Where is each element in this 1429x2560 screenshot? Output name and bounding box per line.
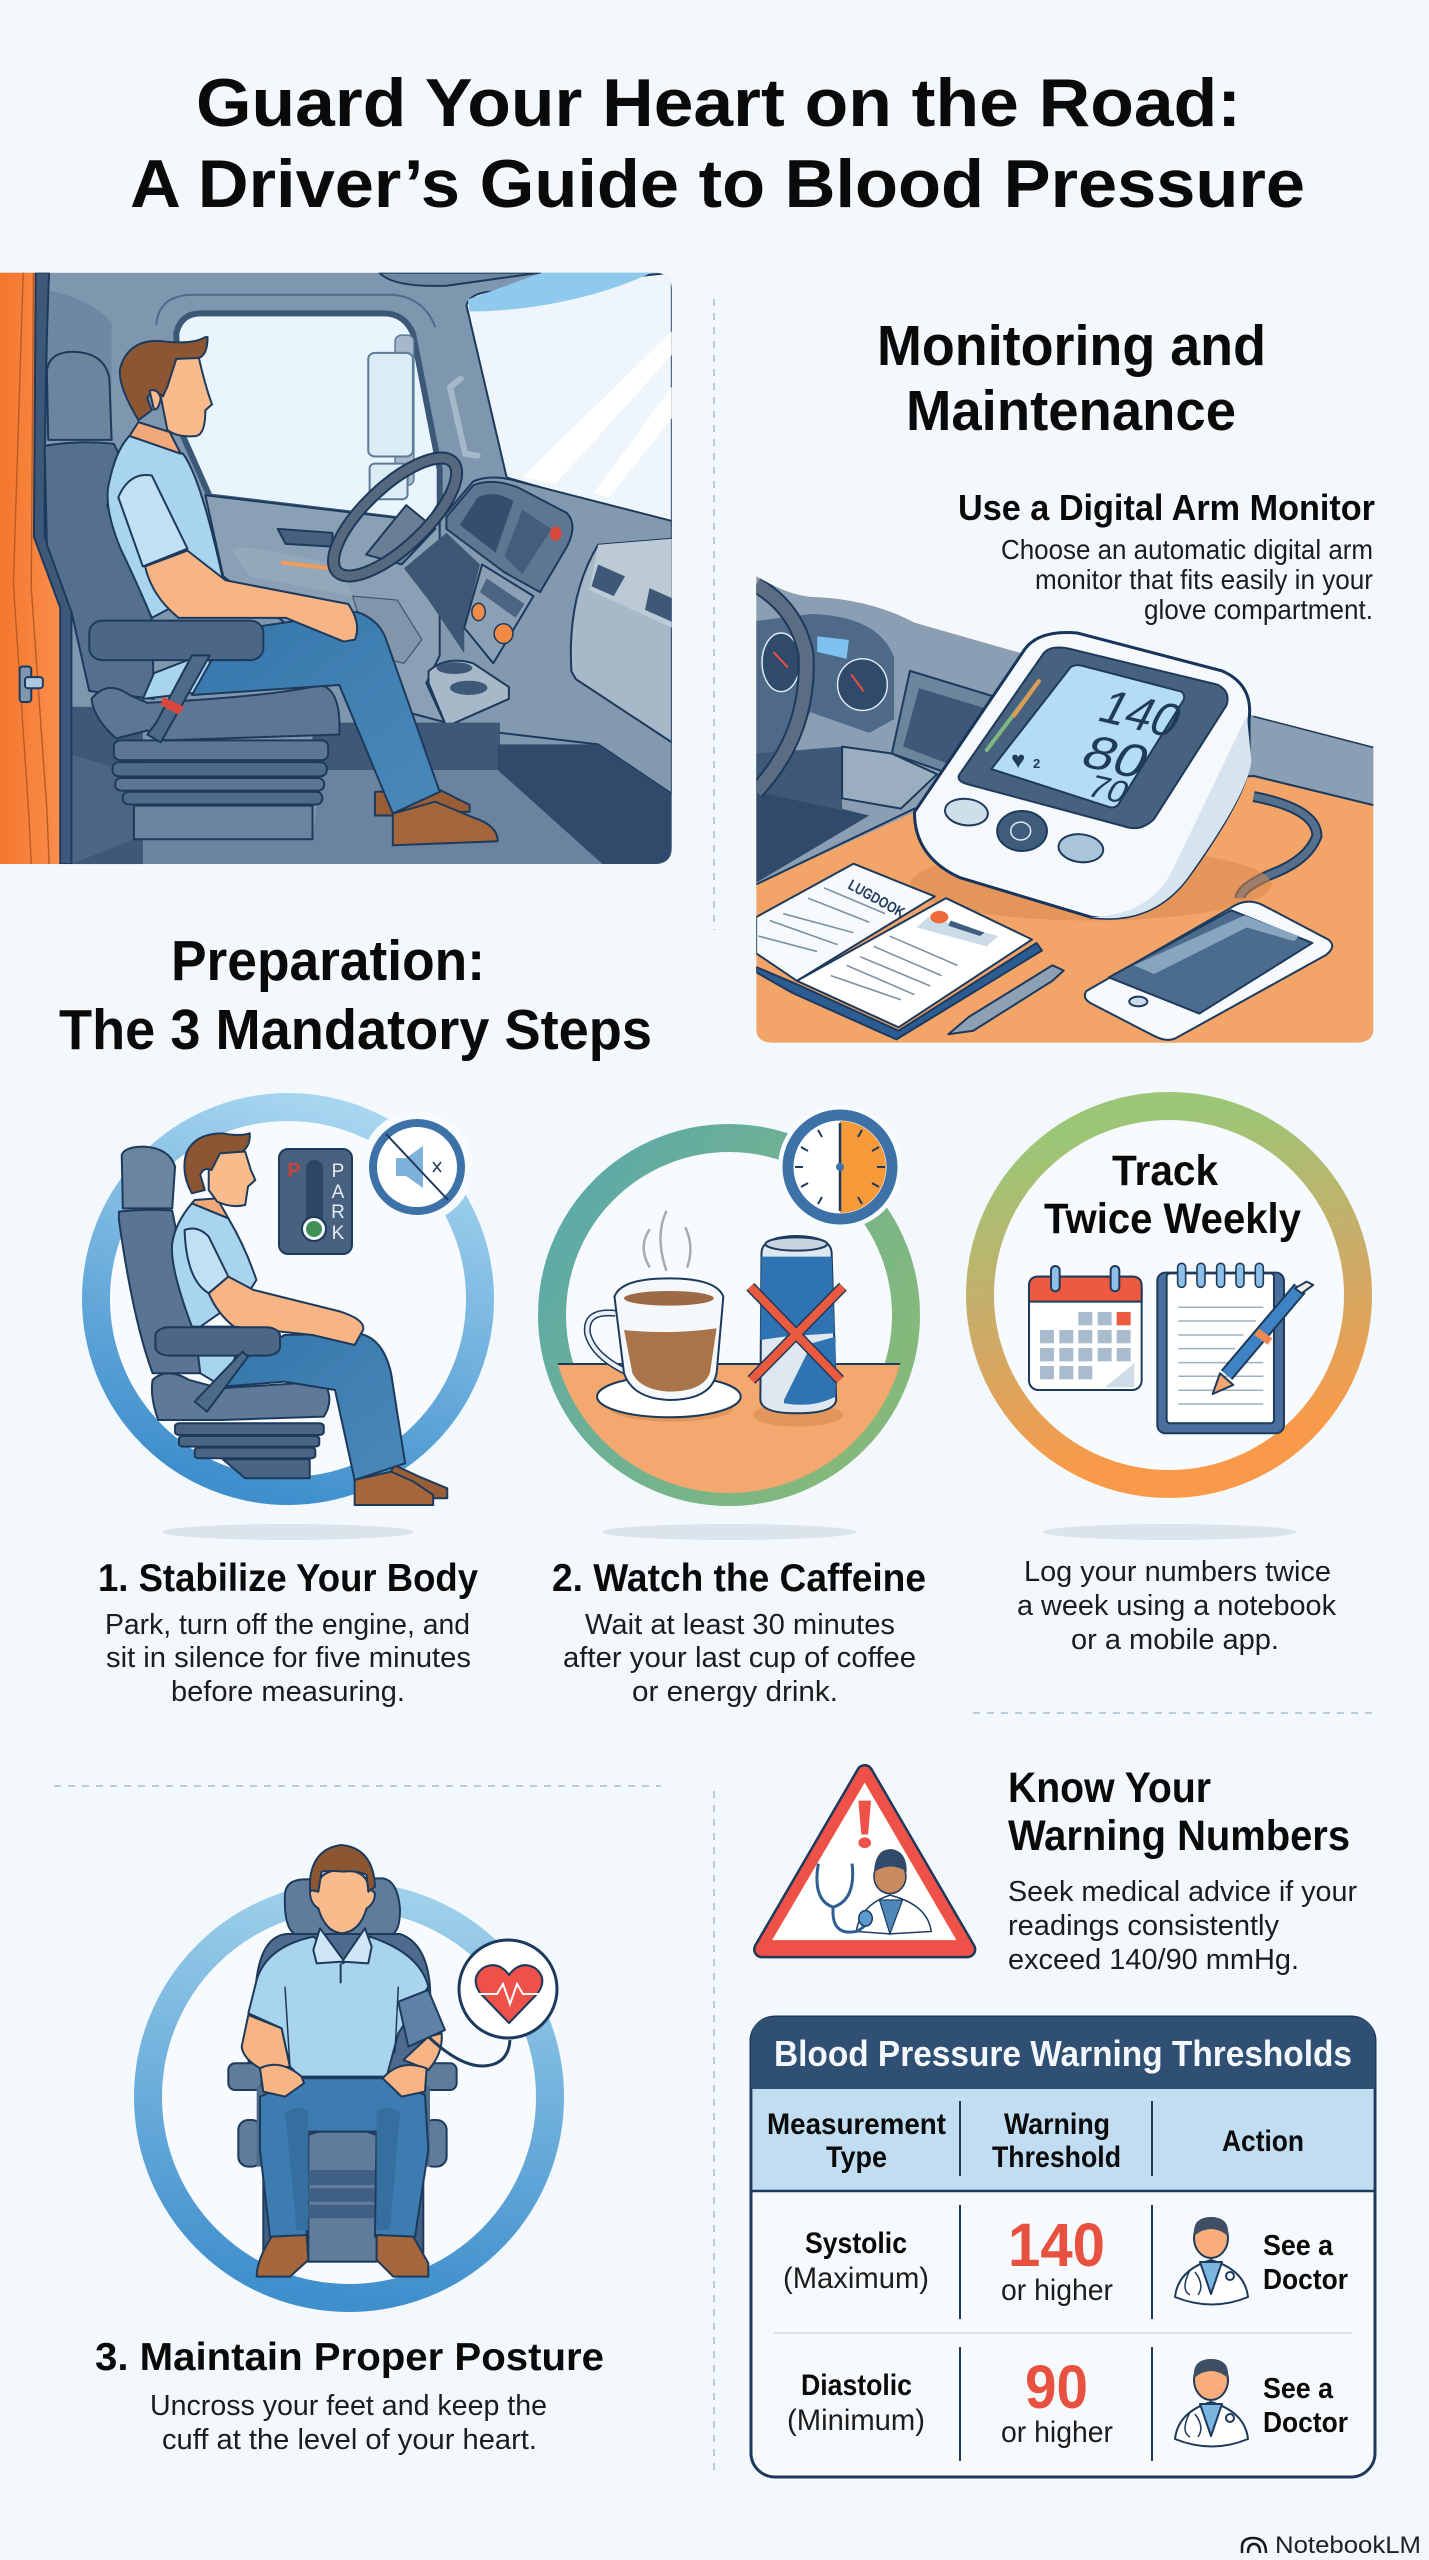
- table row: diastolic: or higher: [1001, 2416, 1113, 2449]
- text block: step 3: [95, 2336, 604, 2456]
- text block: step 2: [552, 1557, 926, 1708]
- table row: systolic: [783, 2211, 1348, 2307]
- table row: diastolic: Doctor: [1263, 2407, 1348, 2439]
- text block: use a digital arm monitor: [958, 487, 1375, 625]
- table title bar: Blood Pressure Warning Thresholds: [774, 2033, 1352, 2074]
- table row: diastolic: Diastolic: [801, 2369, 912, 2402]
- table row: systolic: 140: [1008, 2211, 1105, 2279]
- grab handle: [450, 379, 478, 456]
- text block: step 3: 3. Maintain Proper Posture: [95, 2336, 604, 2379]
- icon: warning triangle with doctor: [762, 1773, 967, 1949]
- ring: [980, 1106, 1358, 1484]
- shadow: [1043, 1524, 1297, 1540]
- monitor readings: 70: [1082, 769, 1135, 810]
- icon: park shifter: A: [332, 1182, 345, 1203]
- door panel: [205, 495, 446, 723]
- shadow: [162, 1524, 414, 1540]
- icon: doctor: [1175, 2217, 1248, 2304]
- steering wheel: [366, 505, 435, 564]
- text block: step 1: 1. Stabilize Your Body: [98, 1557, 478, 1600]
- icon: park shifter: R: [331, 1202, 345, 1223]
- icon: clock: [778, 1105, 902, 1229]
- text block: know your warning numbers: Seek medical advice if your: [1008, 1876, 1357, 1908]
- icon: coffee cup: [587, 1212, 741, 1422]
- monitor readings: 2: [1033, 756, 1040, 771]
- text block: know your warning numbers: exceed 140/90 mmHg.: [1008, 1944, 1299, 1976]
- step 1 illustration: stabilize your body: [96, 1107, 480, 1540]
- table row: systolic: (Maximum): [783, 2262, 929, 2295]
- heading: track twice weekly: Track: [1112, 1147, 1218, 1195]
- monitor readings: ♥: [1011, 747, 1025, 774]
- text block: step 2: 2. Watch the Caffeine: [552, 1557, 926, 1600]
- ring: [96, 1107, 480, 1491]
- illustration: driver seated in truck cab: [0, 273, 672, 865]
- ring: [552, 1138, 906, 1492]
- icon: park shifter: [279, 1149, 352, 1254]
- divider: upper vertical: [713, 299, 715, 930]
- text block: step 2: or energy drink.: [632, 1676, 838, 1708]
- table header row: [751, 2089, 1375, 2191]
- table row: diastolic: (Minimum): [787, 2404, 925, 2437]
- notebook: [756, 943, 1042, 1039]
- monitor readings: 140: [1090, 681, 1191, 747]
- icon: park shifter: P: [332, 1161, 344, 1182]
- icon: doctor: [1175, 2359, 1248, 2446]
- text block: know your warning numbers: Know Your: [1008, 1764, 1211, 1812]
- table title bar: [751, 2017, 1375, 2089]
- table header row: Measurement: [767, 2108, 946, 2141]
- table row: diastolic: [787, 2353, 1348, 2449]
- text block: step 3: Uncross your feet and keep the: [150, 2390, 547, 2422]
- text block: track twice weekly: or a mobile app.: [1071, 1624, 1279, 1656]
- icon: notepad and pen: [1157, 1263, 1313, 1433]
- text block: use a digital arm monitor: Use a Digital Arm Monitor: [958, 487, 1375, 528]
- driver: [375, 790, 470, 816]
- text block: step 2: Wait at least 30 minutes: [585, 1609, 895, 1641]
- table row: systolic: Doctor: [1263, 2264, 1348, 2296]
- icon: calendar: [1029, 1266, 1142, 1390]
- heading: preparation: [59, 929, 652, 1062]
- title: A Driver’s Guide to Blood Pressure: [130, 146, 1305, 222]
- dash: [426, 477, 672, 794]
- icon: park shifter: K: [332, 1223, 345, 1244]
- track twice weekly illustration: [980, 1106, 1358, 1540]
- table header row: Action: [1222, 2125, 1304, 2158]
- table header row: Warning: [1004, 2108, 1110, 2141]
- title: Guard Your Heart on the Road:: [196, 65, 1241, 141]
- table row: systolic: Systolic: [805, 2227, 907, 2260]
- text block: track twice weekly: a week using a notebook: [1017, 1590, 1336, 1622]
- windshield: [466, 273, 672, 525]
- text block: know your warning numbers: [1008, 1764, 1357, 1976]
- heading: monitoring and maintenance: Maintenance: [906, 379, 1236, 443]
- illustration: blood pressure monitor on desk: [756, 574, 1373, 1043]
- title: [130, 65, 1305, 222]
- table: blood pressure warning thresholds: [751, 2017, 1375, 2477]
- text block: use a digital arm monitor: monitor that fits easily in your: [1035, 564, 1373, 595]
- seat: [47, 352, 112, 440]
- heading: track twice weekly: Twice Weekly: [1044, 1195, 1301, 1243]
- text block: know your warning numbers: readings consistently: [1008, 1910, 1279, 1942]
- text block: step 1: before measuring.: [171, 1676, 405, 1708]
- table header row: Threshold: [992, 2141, 1121, 2174]
- table row: diastolic: 90: [1025, 2353, 1088, 2421]
- text block: step 3: cuff at the level of your heart.: [162, 2424, 537, 2456]
- text block: step 2: after your last cup of coffee: [563, 1642, 916, 1674]
- heading: preparation: The 3 Mandatory Steps: [59, 998, 652, 1062]
- table row: diastolic: See a: [1263, 2373, 1334, 2405]
- monitor readings: 80: [1073, 726, 1158, 789]
- text block: step 1: Park, turn off the engine, and: [105, 1609, 470, 1641]
- door: [0, 273, 60, 864]
- floor: [312, 723, 500, 770]
- text block: track twice weekly: Log your numbers twice: [1024, 1556, 1331, 1588]
- notebook label: LUGDOOK: [845, 877, 908, 922]
- text block: know your warning numbers: Warning Numbers: [1008, 1812, 1350, 1860]
- table row: systolic: See a: [1263, 2230, 1334, 2262]
- text block: step 1: [98, 1557, 478, 1708]
- desk: [558, 1363, 900, 1493]
- text block: step 1: sit in silence for five minutes: [106, 1642, 471, 1674]
- text block: track twice weekly: [1017, 1556, 1336, 1656]
- window: [176, 313, 440, 523]
- phone: [1085, 902, 1332, 1040]
- text block: use a digital arm monitor: glove compartment.: [1144, 594, 1373, 625]
- icon: energy can crossed out: [750, 1236, 843, 1427]
- footer: NotebookLM mark: NotebookLM: [1275, 2532, 1421, 2559]
- heading: preparation: Preparation:: [171, 929, 485, 993]
- mirror: [395, 335, 414, 485]
- table header row: Type: [826, 2141, 887, 2174]
- shadow: [602, 1524, 856, 1540]
- monitor body: [914, 633, 1250, 918]
- monitor readings: [1011, 681, 1191, 810]
- icon: heart rate badge: [459, 1940, 557, 2038]
- pen: [948, 965, 1064, 1034]
- text block: use a digital arm monitor: Choose an automatic digital arm: [1001, 534, 1373, 565]
- icon: silence: [361, 1111, 473, 1223]
- icon: park shifter: P: [287, 1160, 301, 1182]
- step 2 illustration: watch the caffeine: [540, 1105, 920, 1540]
- heading: monitoring and maintenance: Monitoring and: [877, 314, 1266, 378]
- heading: monitoring and maintenance: [877, 314, 1266, 443]
- table row: systolic: or higher: [1001, 2274, 1113, 2307]
- ring: [148, 1896, 550, 2298]
- step 3 illustration: maintain proper posture: [148, 1845, 557, 2298]
- heading: track twice weekly: [1044, 1147, 1301, 1243]
